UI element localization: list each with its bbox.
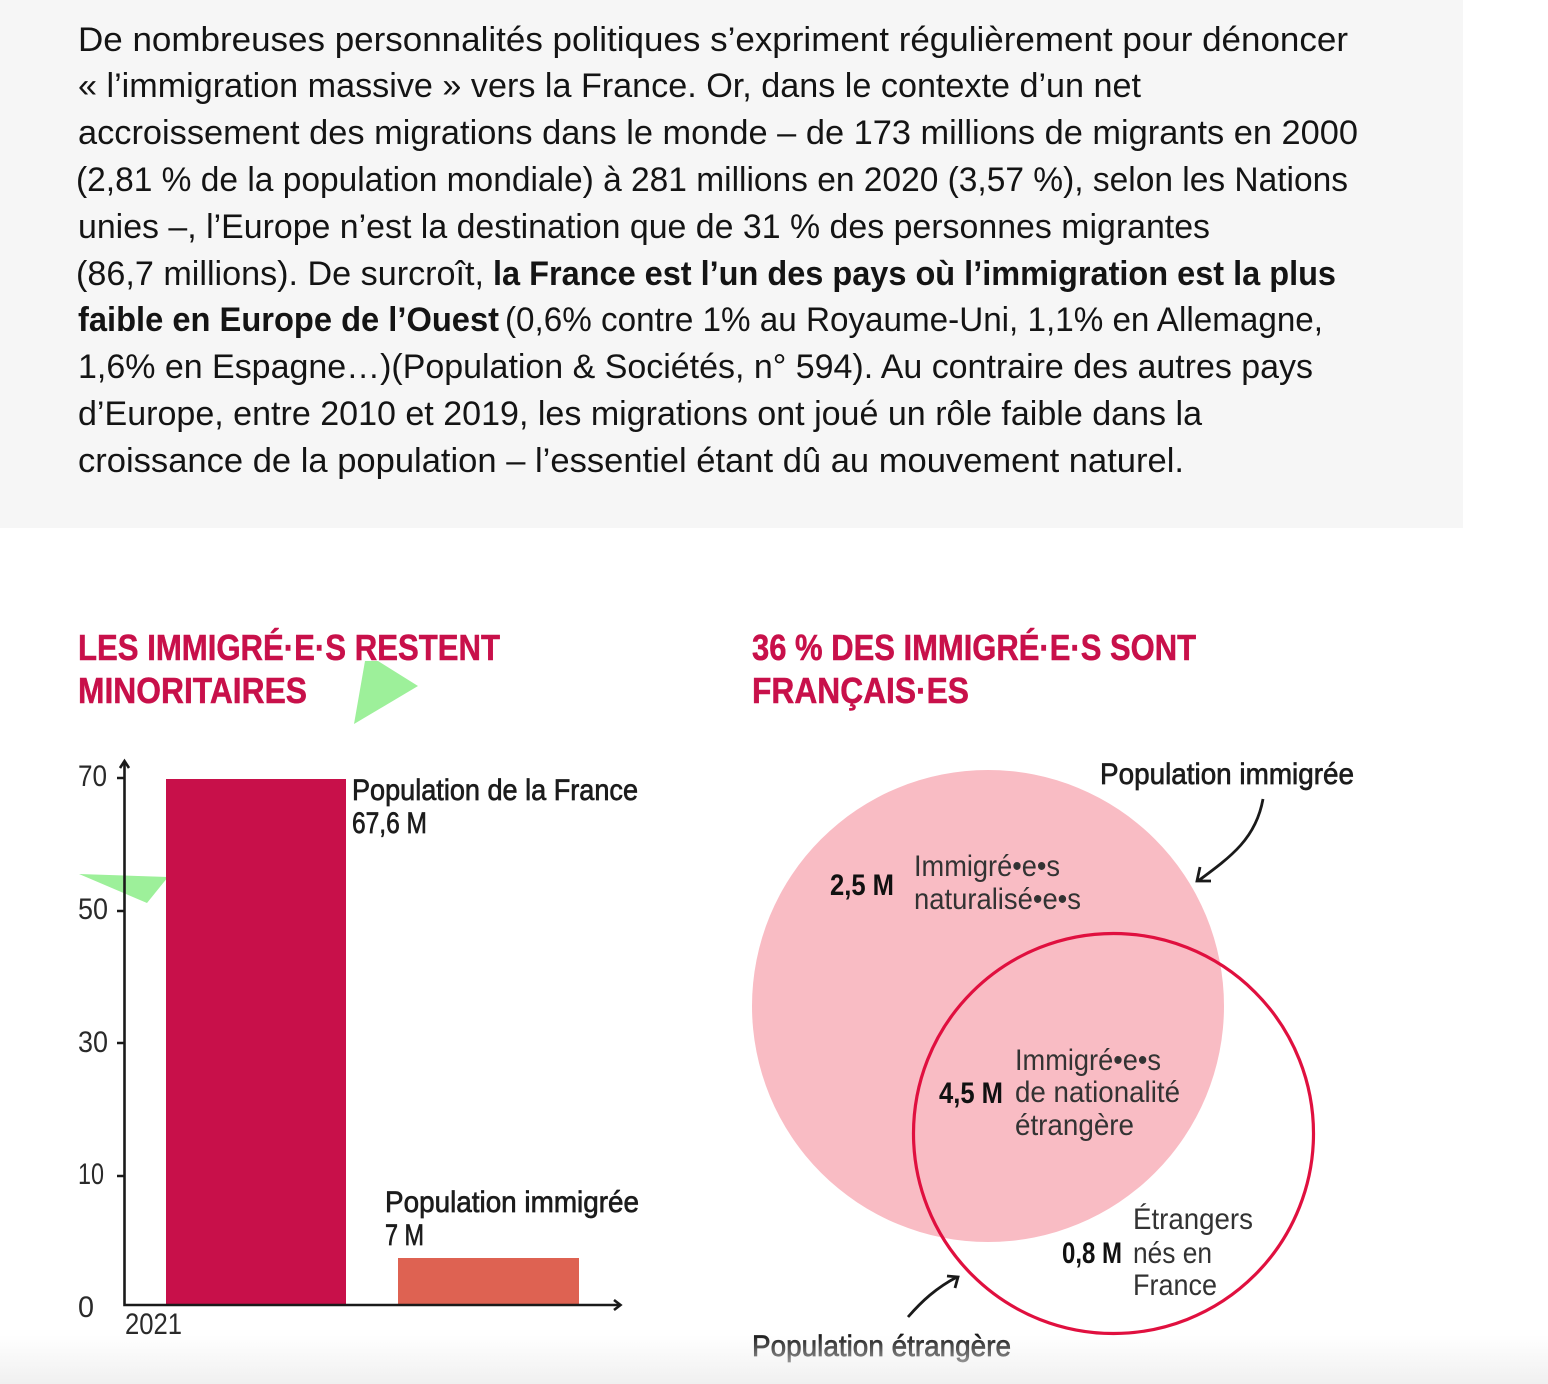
label: foreign-national immigrants: de nationalité — [1015, 1076, 1180, 1109]
paragraph text — [76, 21, 1358, 480]
label: naturalised immigrants: naturalisé•e•s — [914, 883, 1081, 916]
circle: population immigrée — [752, 770, 1224, 1242]
bar: population de la France — [166, 779, 346, 1305]
label: population de la France — [352, 774, 638, 840]
label: population immigrée: Population immigrée — [385, 1186, 639, 1219]
callout: population étrangère: Population étrangère — [752, 1330, 1011, 1363]
label: naturalised immigrants — [830, 850, 1081, 916]
circle: population étrangère — [914, 934, 1314, 1334]
y axis labels: 0 — [78, 1291, 94, 1324]
paragraph text: (86,7 millions). De surcroît, — [76, 255, 484, 293]
label: population immigrée — [385, 1186, 639, 1252]
label: naturalised immigrants: 2,5 M — [830, 869, 894, 902]
heading: left chart: LES IMMIGRÉ·E·S RESTENT — [78, 627, 500, 668]
paragraph text: faible en Europe de l’Ouest — [78, 301, 499, 339]
decorative shape: green triangle left — [79, 874, 168, 903]
label: population de la France: Population de la France — [352, 774, 638, 807]
label: foreign-national immigrants: étrangère — [1015, 1109, 1134, 1142]
paragraph text: la France est l’un des pays où l’immigration est la plus — [493, 255, 1336, 293]
label: foreign-national immigrants: 4,5 M — [939, 1077, 1003, 1110]
callout: population immigrée — [1100, 758, 1354, 881]
y axis labels: 10 — [78, 1158, 104, 1191]
callout: population étrangère — [752, 1276, 1011, 1363]
label: foreigners born in France: Étrangers — [1133, 1203, 1253, 1236]
paragraph text: (2,81 % de la population mondiale) à 281 millions en 2020 (3,57 %), selon les Nations — [76, 161, 1348, 199]
y axis labels: 70 — [78, 760, 107, 793]
bar: population immigrée — [398, 1258, 579, 1305]
decorative shape: green triangle top — [354, 661, 418, 724]
y axis labels: 50 — [78, 893, 108, 926]
label: foreigners born in France: nés en — [1133, 1237, 1212, 1270]
paragraph text: unies –, l’Europe n’est la destination que de 31 % des personnes migrantes — [78, 208, 1210, 246]
panel: introductory text — [0, 0, 1463, 528]
label: foreign-national immigrants — [939, 1044, 1180, 1142]
paragraph text: d’Europe, entre 2010 et 2019, les migrations ont joué un rôle faible dans la — [78, 395, 1202, 433]
heading: right chart — [752, 627, 1196, 711]
bar chart: population — [78, 760, 639, 1341]
arrow: to immigrant circle — [1197, 799, 1263, 881]
venn diagram — [752, 758, 1354, 1363]
paragraph text: De nombreuses personnalités politiques s’expriment régulièrement pour dénoncer — [78, 21, 1348, 59]
paragraph text: 1,6% en Espagne…)(Population & Sociétés, n° 594). Au contraire des autres pays — [78, 348, 1313, 386]
paragraph text: accroissement des migrations dans le monde – de 173 millions de migrants en 2000 — [78, 114, 1358, 152]
arrow: to foreign circle — [908, 1276, 958, 1317]
label: population de la France: 67,6 M — [352, 807, 427, 840]
label: foreigners born in France — [1062, 1203, 1253, 1302]
heading: right chart: FRANÇAIS·ES — [752, 670, 969, 711]
label: foreign-national immigrants: Immigré•e•s — [1015, 1044, 1161, 1077]
heading: right chart: 36 % DES IMMIGRÉ·E·S SONT — [752, 627, 1196, 668]
label: population immigrée: 7 M — [385, 1219, 424, 1252]
heading: left chart: MINORITAIRES — [78, 670, 307, 711]
callout: population immigrée: Population immigrée — [1100, 758, 1354, 791]
chart axes — [117, 761, 620, 1310]
paragraph text: « l’immigration massive » vers la France. Or, dans le contexte d’un net — [78, 67, 1142, 105]
y axis labels — [78, 760, 108, 1324]
paragraph text: (0,6% contre 1% au Royaume-Uni, 1,1% en Allemagne, — [505, 301, 1323, 339]
label: naturalised immigrants: Immigré•e•s — [914, 850, 1060, 883]
heading: left chart — [78, 627, 500, 711]
x axis label: 2021 — [125, 1308, 182, 1341]
paragraph text: croissance de la population – l’essentiel étant dû au mouvement naturel. — [78, 442, 1184, 480]
label: foreigners born in France: 0,8 M — [1062, 1237, 1122, 1270]
y axis labels: 30 — [78, 1026, 108, 1059]
label: foreigners born in France: France — [1133, 1269, 1217, 1302]
